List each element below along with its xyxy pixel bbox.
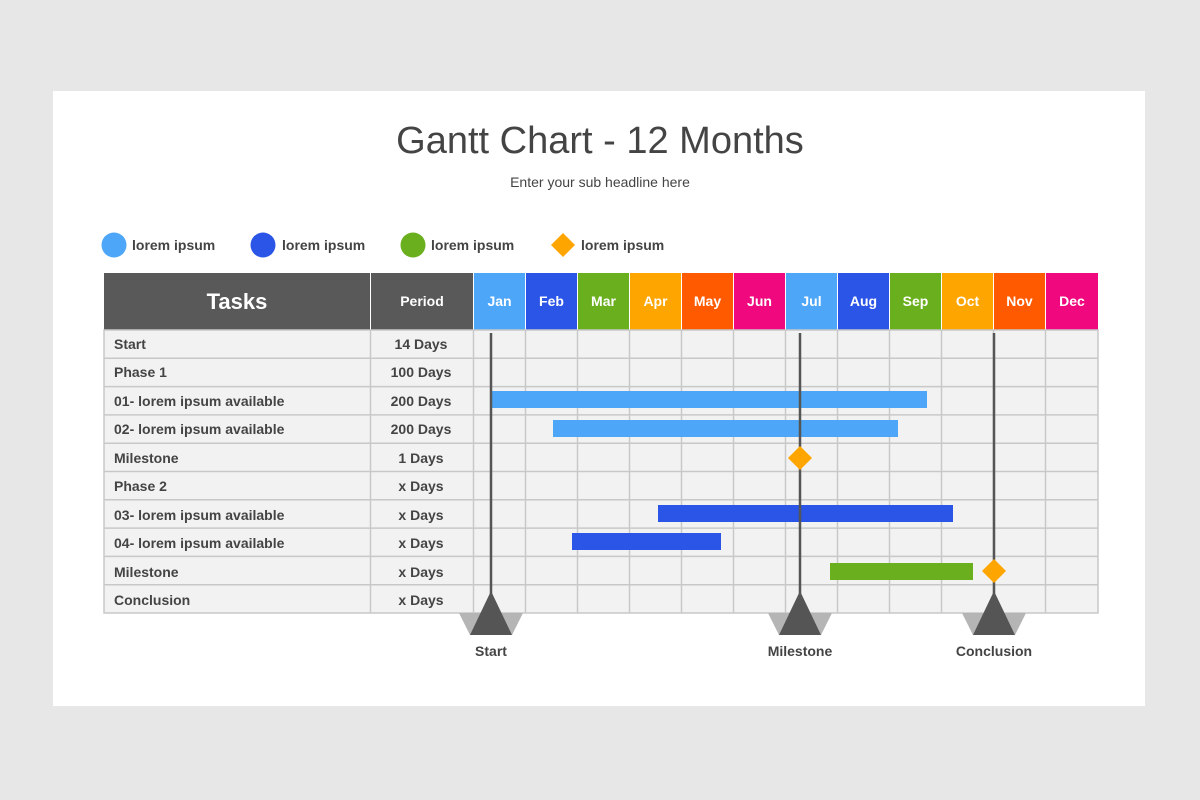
gantt table: 1 Days [398,450,444,466]
gantt table: Sep [903,293,928,309]
gantt table: Mar [591,293,616,309]
gantt table: Nov [1006,293,1033,309]
card [53,91,1145,706]
gantt table: 200 Days [391,421,452,437]
legend: lorem ipsum [431,237,514,253]
marker labels [475,643,1032,659]
subtitle: Enter your sub headline here [510,174,690,190]
marker lines and triangles [459,333,1026,635]
gantt table: Start [114,336,146,352]
gantt table: 01- lorem ipsum available [114,393,285,409]
gantt table: Period [400,293,444,309]
marker labels: Conclusion [956,643,1032,659]
gantt table: Feb [539,293,564,309]
title: Gantt Chart - 12 Months [396,120,804,162]
gantt table: Jun [747,293,772,309]
gantt table: Phase 2 [114,478,167,494]
gantt table: 100 Days [391,364,452,380]
gantt table: 02- lorem ipsum available [114,421,285,437]
gantt table: x Days [398,507,444,523]
gantt table [104,273,1098,613]
gantt table: 04- lorem ipsum available [114,535,285,551]
gantt table: 200 Days [391,393,452,409]
gantt table: x Days [398,478,444,494]
gantt table: May [694,293,721,309]
legend [102,232,664,258]
gantt table: x Days [398,564,444,580]
gantt table: 03- lorem ipsum available [114,507,285,523]
gantt table: x Days [398,592,444,608]
gantt table: x Days [398,535,444,551]
gantt table: Tasks [207,289,267,314]
legend: lorem ipsum [581,237,664,253]
legend: lorem ipsum [132,237,215,253]
marker labels: Start [475,643,507,659]
gantt table: Milestone [114,450,179,466]
gantt table: Apr [643,293,668,309]
gantt table: Jan [487,293,512,309]
gantt table: Jul [801,293,822,309]
gantt table: Conclusion [114,592,190,608]
legend: lorem ipsum [282,237,365,253]
gantt table: Oct [956,293,980,309]
gantt table: Aug [850,293,877,309]
gantt table: 14 Days [395,336,448,352]
gantt table: Dec [1059,293,1085,309]
milestone diamonds [788,446,1006,583]
marker labels: Milestone [768,643,832,659]
gantt table: Phase 1 [114,364,167,380]
gantt table: Milestone [114,564,179,580]
task bars [491,391,973,580]
